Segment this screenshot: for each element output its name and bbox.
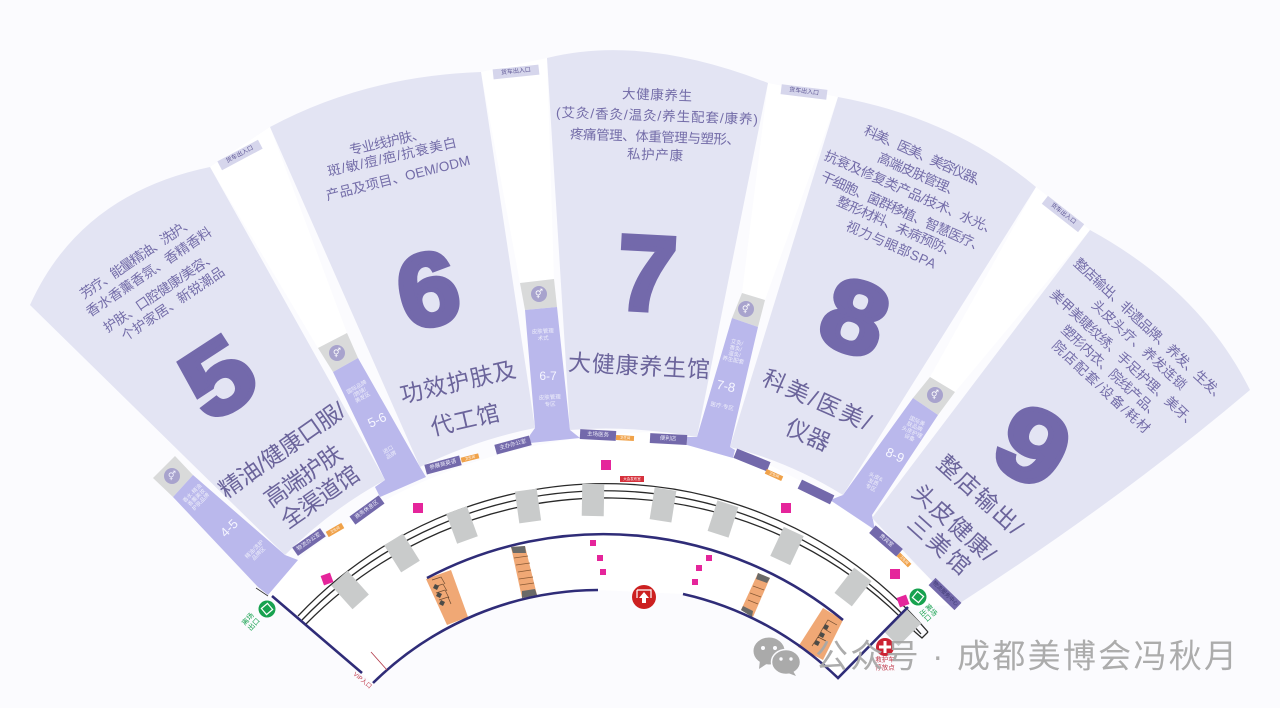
- corridor 6-7: 6-7: [539, 369, 557, 383]
- icon: ambulance: [875, 638, 895, 672]
- hall 9 title: 三美馆: [902, 510, 976, 580]
- corridor 7-8: 7-8: [715, 377, 737, 395]
- corridor 6-7: 专区: [544, 400, 556, 408]
- corridor 4-5: 香薰美妆: [186, 486, 207, 508]
- VIP entrance: [256, 588, 387, 690]
- icon: left exit: 出口: [245, 616, 261, 632]
- panel: hall 8: [730, 97, 1036, 495]
- corridor 4-5: [153, 456, 298, 595]
- corridor 8-9: 8-9: [883, 444, 907, 466]
- truck entrance labels: 货车出入口: [789, 85, 820, 97]
- icon: left exit: [239, 600, 276, 632]
- truck entrance labels: 货车出入口: [1049, 201, 1078, 226]
- corridor 6-7: 术式: [537, 334, 549, 342]
- panel: hall 9: [872, 230, 1250, 605]
- service room strips: 贵宾室: [878, 532, 896, 549]
- grey gate blocks: [331, 484, 921, 646]
- hall 6 description: 专业线护肤、: [348, 126, 426, 158]
- icon: ambulance: 停放点: [875, 662, 895, 672]
- panel: hall 6: [270, 72, 535, 467]
- hall 6 title: 功效护肤及: [398, 356, 518, 408]
- corridor 6-7: [520, 279, 580, 443]
- hall 7 description: [556, 85, 758, 163]
- service room strips: 卫生间: [464, 454, 476, 461]
- hall 5 description: 香水香薰香氛、香精香料: [83, 224, 215, 320]
- hall 8 description: 整形材料、未病预防、: [835, 194, 959, 260]
- hall 6 description: [324, 126, 472, 203]
- corridor 4-5: 4-5: [217, 516, 241, 540]
- hall 7 description: (艾灸/香灸/温灸/养生配套/康养): [556, 104, 758, 127]
- corridor 4-5: 护肤品牌: [190, 491, 211, 512]
- service room strips: 主办办公室: [498, 436, 528, 451]
- corridor 6-7: 皮肤管理: [539, 392, 561, 402]
- corridor 7-8: 艾灸/: [730, 337, 744, 348]
- service room strips: 便利店: [660, 434, 677, 442]
- icon: left exit: 离场: [239, 610, 255, 627]
- corridor 4-5: 香水·精油: [181, 481, 204, 504]
- corridor 4-5: ⚥: [168, 470, 176, 481]
- hall 6 number: 6: [386, 227, 470, 353]
- corridor 4-5: 品牌区: [250, 544, 267, 562]
- corridor 7-8: [687, 293, 765, 458]
- corridor 8-9: 发质: [867, 476, 881, 488]
- corridor 7-8: ⚥: [742, 303, 750, 314]
- service room strips: 卫生间: [768, 470, 780, 479]
- hall 9 title: 整店输出/: [932, 450, 1029, 541]
- hall 8 description: 高端皮肤管理、: [875, 149, 963, 200]
- icon: main stage: [632, 585, 656, 609]
- hall 5 description: 个护家居、新锐潮品: [118, 263, 227, 344]
- pink service markers: [321, 460, 909, 607]
- corridor gaps: [210, 58, 1090, 392]
- rail lines: [298, 484, 928, 638]
- hall 7 number: 7: [614, 214, 680, 334]
- corridor 8-9: 头皮护理: [900, 424, 924, 440]
- service room strips: 卫生间: [899, 554, 910, 565]
- service room strips: 物流服务中心: [931, 579, 961, 608]
- hall 8 description: 干细胞、菌群移植、智慧医疗、: [819, 169, 987, 255]
- icon: right exit: 出口: [918, 607, 934, 623]
- hall 8 description: 抗衰及修复类产品/技术、水光、: [822, 147, 1000, 238]
- hall 8 title: 科美/医美/: [759, 365, 876, 436]
- corridor 5-6: 进口: [381, 443, 395, 456]
- hall 5 number: 5: [161, 314, 275, 442]
- hall 7 description: 私护产康: [627, 146, 684, 163]
- hall 9 title: [902, 450, 1029, 580]
- panel: hall 7: [547, 50, 768, 437]
- service room strips: 卫生间: [329, 525, 341, 534]
- corridor 7-8: 温灸/: [728, 349, 742, 359]
- corridor 5-6: 国际品牌: [345, 378, 368, 396]
- hall 5 title: 全渠道馆: [276, 461, 364, 533]
- hall 7 description: 大健康养生: [622, 85, 692, 104]
- VIP entrance: VIP入口: [352, 671, 373, 690]
- service room strips: [292, 429, 961, 610]
- hall 5 description: 护肤、口腔健康/美容、: [100, 248, 219, 335]
- corridor 8-9: ⚥: [931, 389, 939, 400]
- hall 6 title: [398, 356, 518, 441]
- hall 9 description: 美甲美睫纹绣、手足护理、美牙、: [1047, 287, 1201, 431]
- corridor 5-6: /跨境/: [351, 385, 368, 399]
- hall 5 title: 精油/健康口服/: [214, 397, 351, 503]
- hall 6 description: 斑/敏/痘/疤/抗衰美白: [326, 134, 458, 179]
- corridor 6-7: ⚥: [535, 288, 543, 299]
- watermark text: 公众号 · 成都美博会冯秋月: [815, 638, 1237, 674]
- corridor 8-9: 设备: [903, 431, 917, 443]
- hall 8 title: 仪器: [782, 414, 834, 456]
- corridor 5-6: ⚥: [333, 347, 341, 358]
- hall 7 description: 疼痛管理、体重管理与塑形、: [570, 126, 740, 147]
- corridor 7-8: 养生配套: [722, 354, 745, 366]
- hall 5 description: 芳疗、能量精油、洗护、: [77, 214, 197, 302]
- corridor 8-9: 肤品牌: [906, 419, 924, 434]
- hall 9 title: 头皮健康/: [907, 479, 1001, 568]
- hall 5 title: 高端护肤: [259, 440, 347, 512]
- truck entrance labels: 货车出入口: [224, 144, 255, 165]
- corridor 5-6: 品牌: [384, 448, 398, 461]
- corridor 4-5: 精油/洗护: [243, 538, 266, 560]
- icon: wechat watermark: [753, 637, 800, 676]
- hall 9 description: 院店配套/设备/耗材: [1049, 337, 1154, 436]
- service room strips: 商务休息区: [353, 498, 380, 521]
- icon: right exit: 离场: [924, 601, 940, 618]
- service room strips: 卫生间: [620, 435, 631, 440]
- truck entrance labels: [217, 65, 1084, 232]
- service room strips: 物流办公室: [295, 530, 322, 552]
- panel: hall 5: [30, 167, 385, 555]
- icon: ambulance: 救护车: [875, 654, 895, 664]
- corridor 6-7: 皮肤管理: [532, 326, 554, 336]
- orange halls: [426, 546, 843, 660]
- corridor 7-8: 医疗·专区: [710, 400, 735, 413]
- hall 5 description: [77, 214, 227, 344]
- hall 8 description: 视力与眼部SPA: [844, 218, 938, 272]
- red label: 大会发布室: [623, 476, 641, 481]
- corridor 5-6: 美发区: [353, 389, 372, 405]
- corridor 7-8: 香灸/: [729, 343, 743, 353]
- hall 9 description: 整店输出、非遗品牌、养发、生发、: [1071, 255, 1230, 405]
- hall floor: [258, 432, 957, 683]
- icon: right exit: [910, 588, 940, 623]
- hall 6 description: 产品及项目、OEM/ODM: [324, 153, 472, 203]
- corridor 8-9: 专区: [864, 482, 878, 494]
- service room strips: 主场医务: [587, 429, 610, 439]
- corridor 8-9: 国际美: [908, 414, 927, 428]
- hall 9 description: 塑形内衣、院线产品、: [1058, 322, 1164, 422]
- hall 9 number: 9: [975, 379, 1091, 513]
- service room strips: 参展商英语: [428, 456, 458, 471]
- red label: [620, 476, 644, 482]
- hall 8 description: [819, 122, 1000, 272]
- corridor 8-9: [830, 377, 955, 530]
- hall 6 title: 代工馆: [428, 399, 502, 441]
- hall 9 description: 头皮头疗、养发连锁: [1089, 297, 1189, 393]
- corridor 5-6: [318, 333, 426, 497]
- truck entrance labels: 货车出入口: [501, 65, 531, 77]
- corridor 8-9: 头皮&: [868, 470, 885, 484]
- corridor 5-6: 5-6: [365, 409, 389, 431]
- navy hall outline: [272, 534, 908, 683]
- hall 7 title: 大健康养生馆: [567, 349, 711, 383]
- hall 8 number: 8: [806, 253, 904, 381]
- hall 8 description: 科美、医美、美容仪器、: [862, 122, 991, 191]
